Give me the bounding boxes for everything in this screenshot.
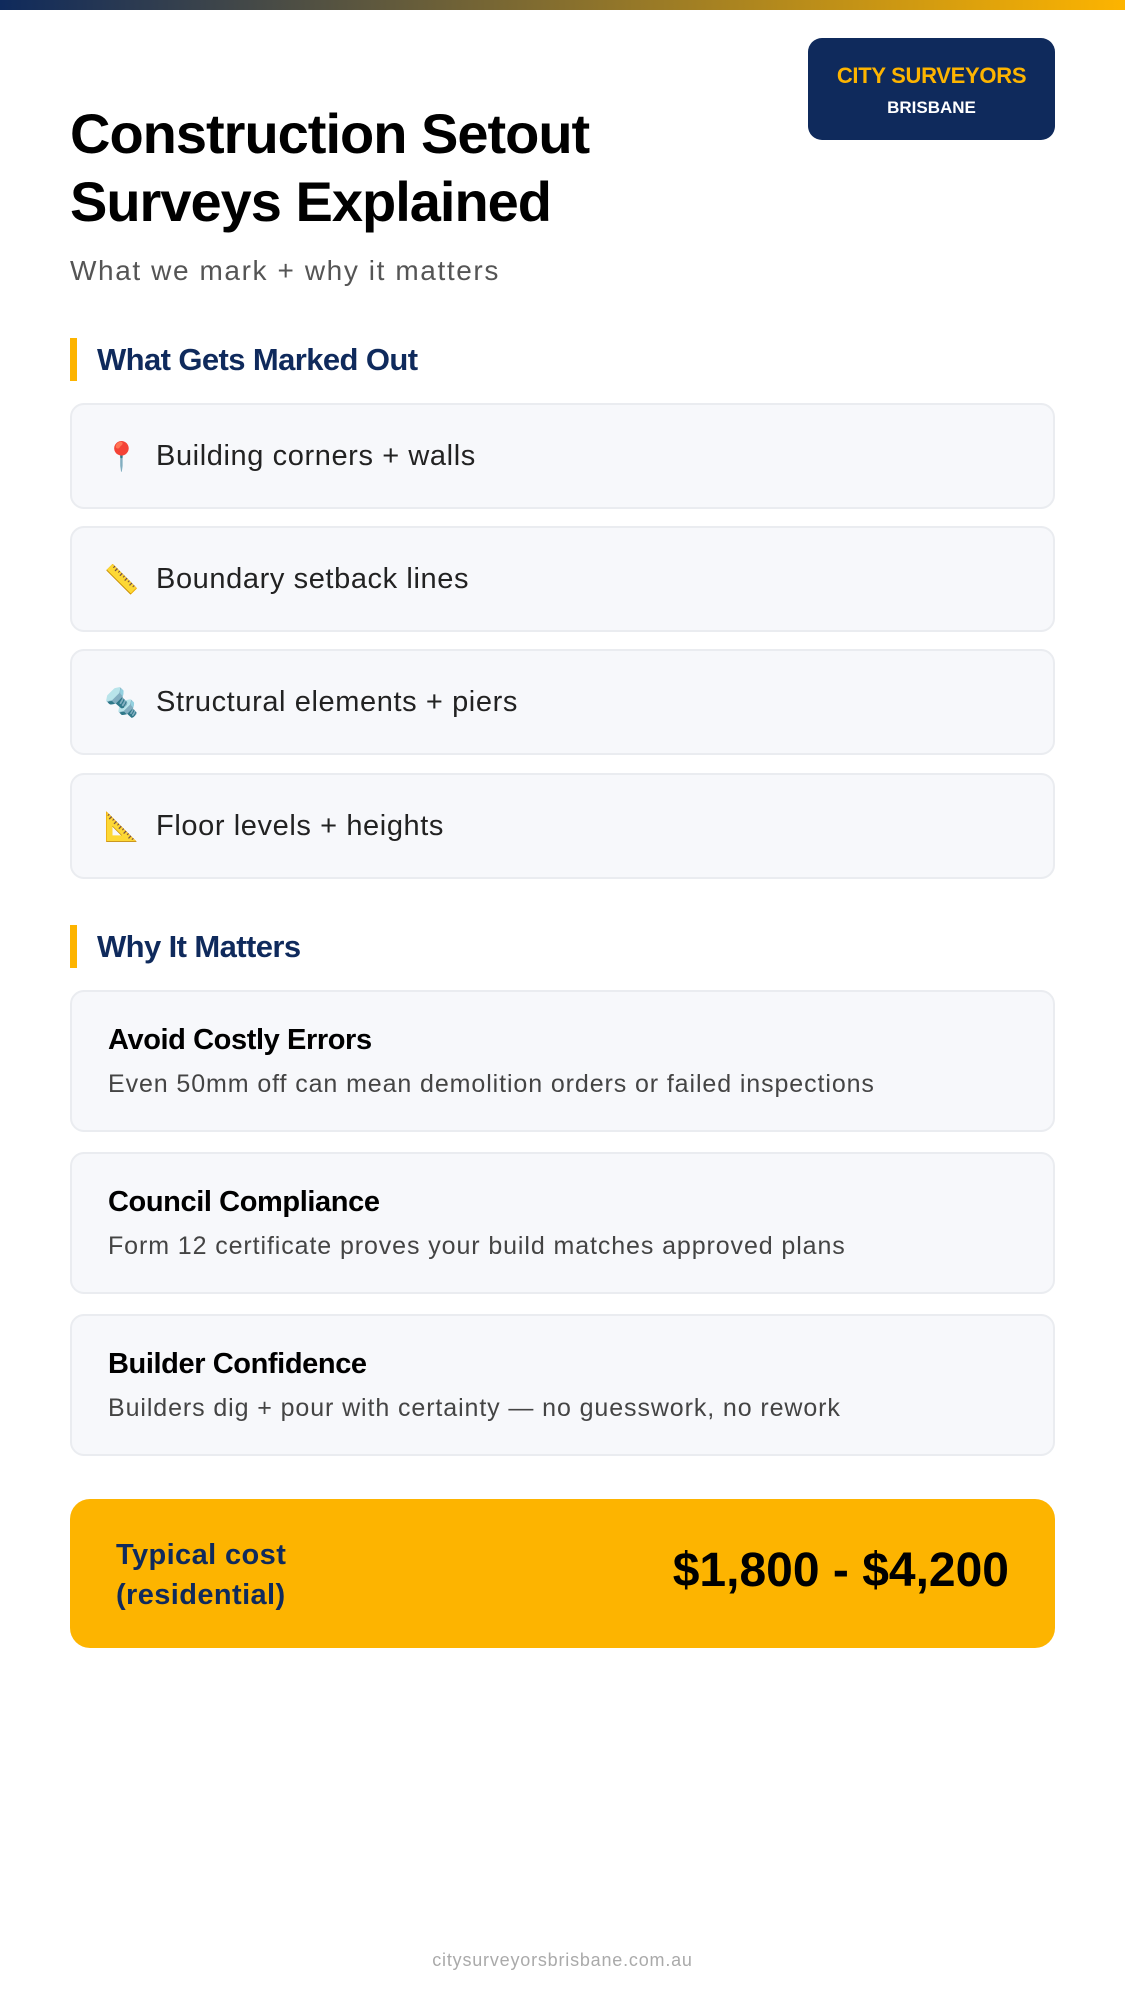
section heading: what gets marked out: What Gets Marked Out [97, 342, 417, 377]
title: Construction Setout [70, 102, 589, 165]
card: builder confidence: Builder Confidence [108, 1348, 367, 1380]
title: Surveys Explained [70, 170, 551, 233]
item card: boundary setback: Boundary setback lines [156, 562, 469, 594]
cost callout: Typical cost [116, 1539, 286, 1571]
item card: boundary setback [70, 526, 1055, 632]
item card: floor levels: 📐 [104, 810, 140, 842]
card: builder confidence [70, 1314, 1055, 1456]
item card: building corners: Building corners + walls [156, 440, 476, 472]
item card: building corners [70, 403, 1055, 509]
top gradient bar [0, 0, 1125, 10]
cost callout: $1,800 - $4,200 [673, 1544, 1009, 1597]
subtitle: What we mark + why it matters [70, 255, 500, 286]
item card: building corners: 📍 [104, 440, 140, 472]
item card: floor levels: Floor levels + heights [156, 810, 444, 842]
cost callout: (residential) [116, 1579, 286, 1611]
card: council compliance [70, 1152, 1055, 1294]
item card: boundary setback: 📏 [104, 564, 140, 594]
logo badge: CITY SURVEYORS [837, 63, 1026, 88]
logo badge [808, 38, 1055, 140]
footer url: citysurveyorsbrisbane.com.au [432, 1950, 693, 1970]
item card: structural: 🔩 [104, 686, 140, 718]
card: avoid costly errors: Even 50mm off can mean demolition orders or failed inspections [108, 1070, 875, 1098]
card: builder confidence: Builders dig + pour with certainty — no guesswork, no rework [108, 1394, 841, 1422]
logo badge: BRISBANE [887, 98, 976, 117]
card: council compliance: Council Compliance [108, 1186, 380, 1218]
item card: floor levels [70, 773, 1055, 879]
card: avoid costly errors [70, 990, 1055, 1132]
section heading: why it matters: Why It Matters [97, 929, 300, 964]
item card: structural [70, 649, 1055, 755]
item card: structural: Structural elements + piers [156, 686, 518, 718]
card: council compliance: Form 12 certificate proves your build matches approved plans [108, 1232, 846, 1260]
card: avoid costly errors: Avoid Costly Errors [108, 1024, 372, 1056]
cost callout [70, 1499, 1055, 1648]
title [70, 102, 590, 233]
